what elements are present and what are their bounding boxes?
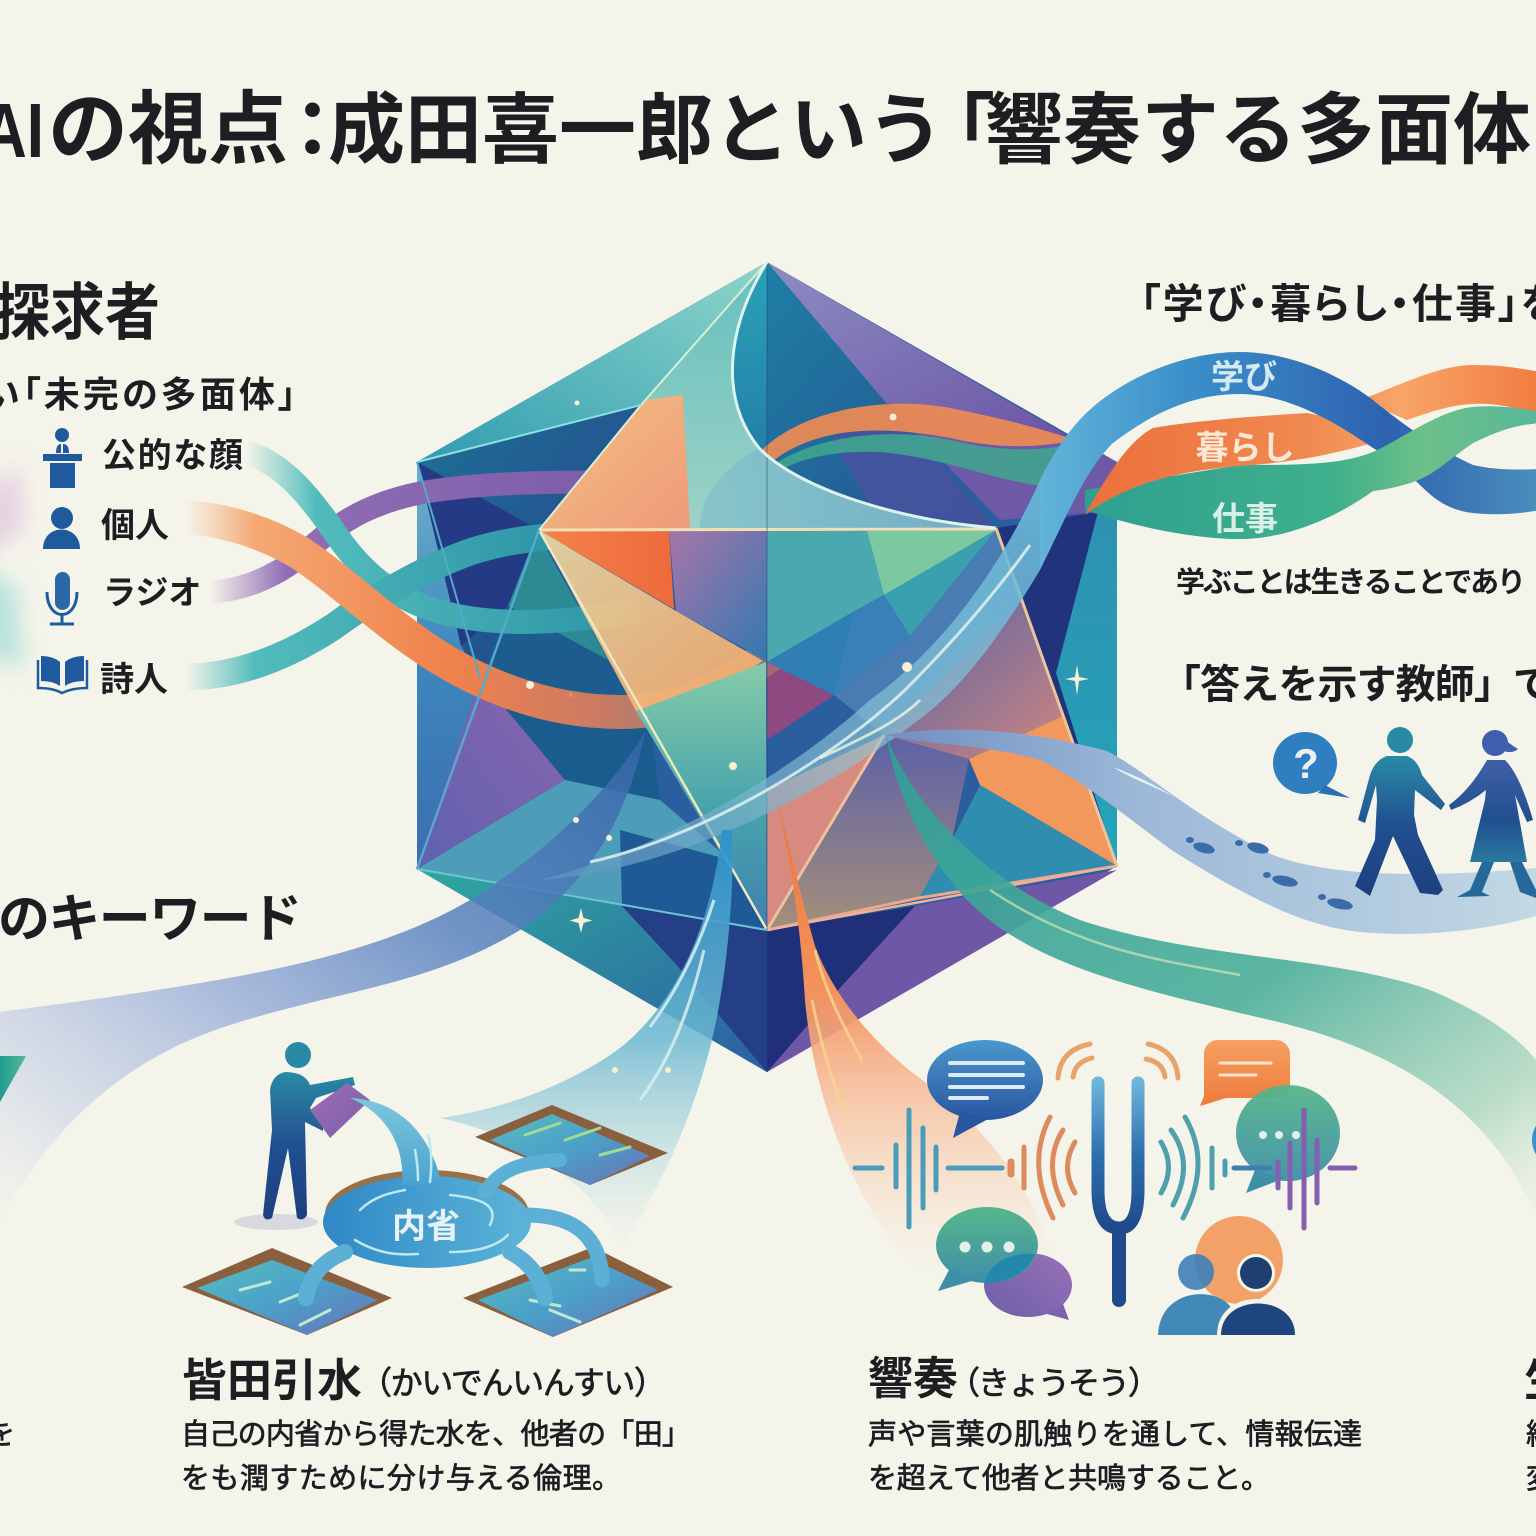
description: 自己の内省から得た水を、他者の「田」 [181, 1418, 691, 1451]
right edge blue bubble fragment [1532, 1112, 1536, 1168]
facet: central taupe [767, 735, 969, 930]
facet: pale blue under arc [700, 448, 996, 528]
term: 響奏 [868, 1353, 958, 1404]
facet: purple blue [669, 530, 767, 661]
ribbon: orange upper return [1360, 365, 1536, 420]
label: 公的な顔: 公的な顔 [102, 437, 243, 475]
ribbon: purple [210, 482, 590, 592]
left ribbons: persona strands [185, 452, 770, 712]
pond rim [325, 1170, 529, 1258]
waveform left [855, 1110, 1011, 1227]
icon: person [43, 507, 80, 549]
water stream [350, 1098, 442, 1185]
sound arcs around fork [1024, 1044, 1212, 1218]
pond labelled 内省 [323, 1176, 531, 1268]
facet: red orange [539, 530, 674, 609]
label: ラジオ: ラジオ [103, 574, 201, 611]
ribbon: downward orange [778, 802, 1050, 1270]
facet: right dark [996, 512, 1117, 866]
keyword: 響奏 [868, 1353, 1362, 1495]
icon: overlapping chat bubbles [936, 1207, 1072, 1320]
field: bottom right [463, 1247, 673, 1337]
reading: （きょうそう） [948, 1365, 1160, 1401]
icon: podium [43, 428, 82, 488]
field: bottom left [182, 1248, 392, 1335]
icon: microphone [47, 572, 77, 624]
water channels [306, 1160, 602, 1298]
icon: tuning fork [1098, 1083, 1138, 1307]
rim lines [539, 530, 767, 930]
ribbon: teal from 詩人 [185, 535, 570, 677]
shadow [234, 1214, 318, 1230]
facet: right teal [767, 530, 884, 662]
right edge text fragments [1524, 1355, 1536, 1495]
icon: bucket [310, 1083, 370, 1138]
title: 響奏する多面体 [985, 86, 1531, 174]
title: 成田喜一郎という [328, 88, 944, 174]
facet: green lower [636, 662, 767, 930]
ribbons entering the polyhedron upper right [762, 404, 1085, 490]
facet: left sliver [417, 462, 480, 869]
field: top right [475, 1105, 668, 1185]
facet: right pink [884, 600, 1063, 759]
ribbon: downward blue [440, 830, 732, 1247]
title: 「 [918, 88, 995, 174]
facet: bottom right [767, 870, 1117, 1072]
facet: apex arc [732, 262, 767, 460]
persona list [38, 428, 243, 699]
label: 個人: 個人 [101, 507, 169, 545]
ribbon: teal from 公的な顔 [245, 452, 640, 622]
central polyhedron [417, 262, 1117, 1072]
illustration: 皆田引水: 内省 [392, 1208, 460, 1246]
facet: upper left dark [417, 405, 641, 680]
icon: people silhouettes [1158, 1216, 1295, 1335]
term: 皆田引水 [182, 1355, 362, 1406]
facet: teal triangle [508, 532, 608, 660]
ribbon: orange 暮らし [1085, 413, 1373, 515]
title [0, 85, 1531, 174]
figure: walker woman [1449, 730, 1536, 898]
title: の視点 [48, 85, 288, 174]
right text: 学ぶことは: 学ぶことは生きることであり [1176, 566, 1526, 599]
ribbon: blue 学び [1040, 352, 1536, 570]
hexagon base [417, 262, 1117, 1072]
waveform right [1225, 1110, 1355, 1228]
icon: question bubble [1273, 732, 1350, 798]
facet: left lower purple [417, 678, 565, 869]
facet: peach upper [539, 395, 690, 530]
icon: book [38, 656, 87, 693]
ribbon: green 仕事 [1085, 406, 1536, 539]
sparkles [526, 400, 1089, 1073]
keyword: 皆田引水 [181, 1355, 691, 1495]
ribbon label 暮らし: 暮らし [1196, 429, 1294, 466]
figure: walker man [1355, 727, 1445, 896]
title: ： [274, 88, 351, 174]
ribbon: orange from 個人 [185, 517, 770, 712]
facet: peach lower [539, 530, 763, 711]
ribbon label 仕事: 仕事 [1212, 500, 1278, 537]
label: 詩人: 詩人 [100, 661, 168, 699]
facet: mint upper [539, 262, 996, 530]
ribbon: green crossing over blue [1373, 406, 1536, 491]
icon: speech bubble orange [1200, 1040, 1290, 1106]
heading: 探求者: 探求者 [0, 279, 160, 348]
ribbon: large blue swoosh through polyhedron [540, 480, 1040, 880]
icon: teal arrow at left edge [0, 1056, 26, 1102]
ribbon: guide path with footprints [884, 730, 1536, 934]
left glow of persona origin [0, 465, 24, 668]
front kite facets [417, 262, 1117, 1072]
ribbon: downward green right [886, 735, 1536, 1215]
footprints [1186, 837, 1354, 912]
ribbons: 学び・暮らし・仕事 [1040, 352, 1536, 570]
ribbon: bottom-left blue swoosh [0, 732, 645, 1220]
illustration: 響奏 [855, 1040, 1355, 1335]
facet: top left mint [417, 262, 767, 462]
illustration: question bubble and walkers [1273, 727, 1536, 898]
reading: （かいでんいんすい） [360, 1365, 666, 1401]
figure: person pouring water [263, 1042, 355, 1219]
icon: question bubble: ? [1293, 740, 1319, 787]
description: 声や言葉の肌触りを通して、情報伝達 [868, 1418, 1362, 1451]
ribbon label 学び: 学び [1211, 358, 1277, 395]
keyword: 響奏: を超えて他者と共鳴すること。 [868, 1462, 1270, 1495]
facet: lower band [417, 780, 730, 906]
icon: green speech bubble [1236, 1085, 1340, 1193]
illustration: 皆田引水 [182, 1042, 673, 1337]
facet: top right purple [767, 262, 1070, 437]
icon: speech bubble blue [927, 1040, 1043, 1138]
keyword: 皆田引水: をも潤すために分け与える倫理。 [181, 1462, 621, 1495]
heading: キーワード: のキーワード [0, 891, 302, 949]
pond ripples [355, 1135, 508, 1254]
